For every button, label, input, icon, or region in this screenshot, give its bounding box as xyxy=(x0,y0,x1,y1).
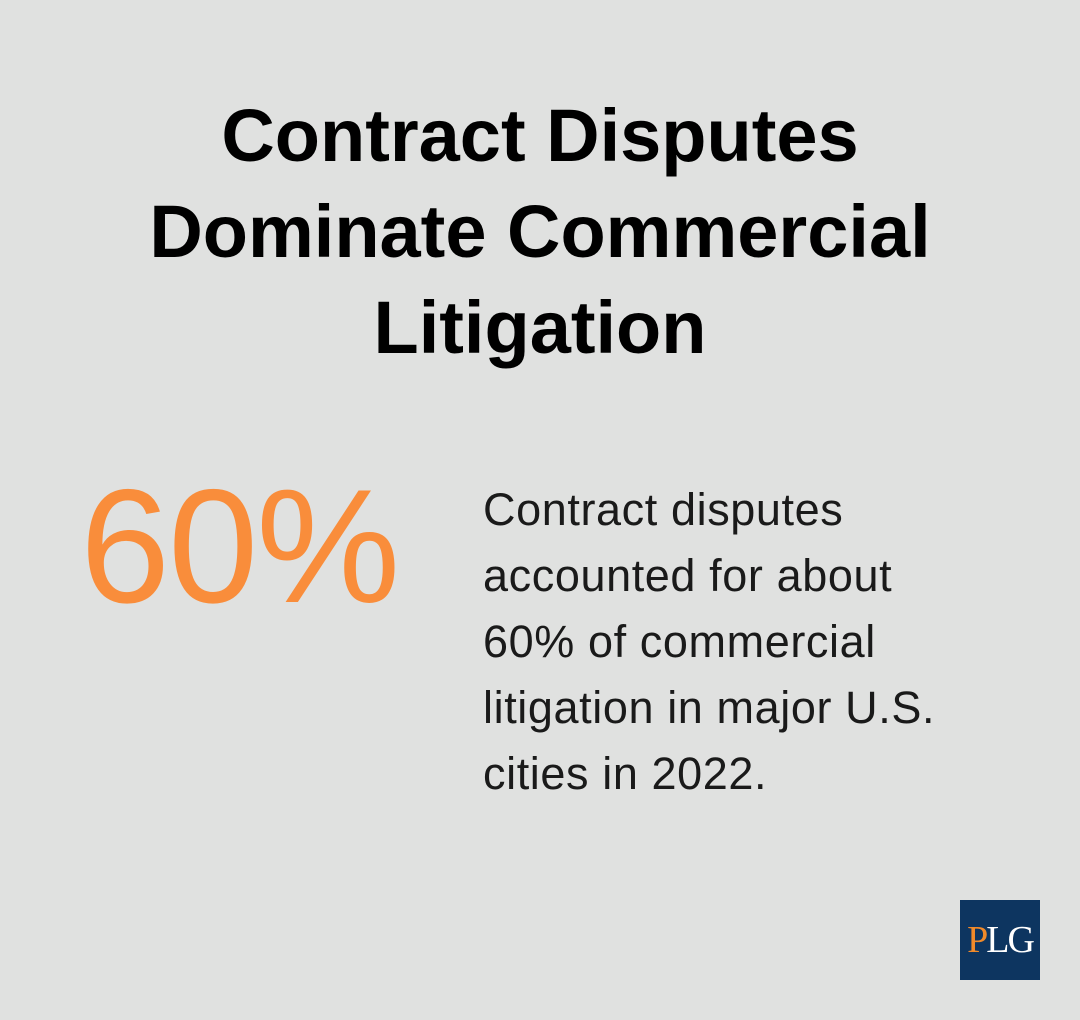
description text: cities in 2022. xyxy=(483,748,767,799)
description text: Contract disputes xyxy=(483,484,843,535)
title: Dominate Commercial xyxy=(149,190,931,273)
title: Contract Disputes xyxy=(221,94,859,177)
title: Litigation xyxy=(374,286,706,369)
description text: 60% of commercial xyxy=(483,616,876,667)
description text: accounted for about xyxy=(483,550,892,601)
title xyxy=(149,94,931,369)
description text xyxy=(483,484,935,799)
big stat: 60% xyxy=(80,456,398,637)
logo: PLG xyxy=(967,919,1033,961)
logo xyxy=(960,900,1040,980)
description text: litigation in major U.S. xyxy=(483,682,935,733)
